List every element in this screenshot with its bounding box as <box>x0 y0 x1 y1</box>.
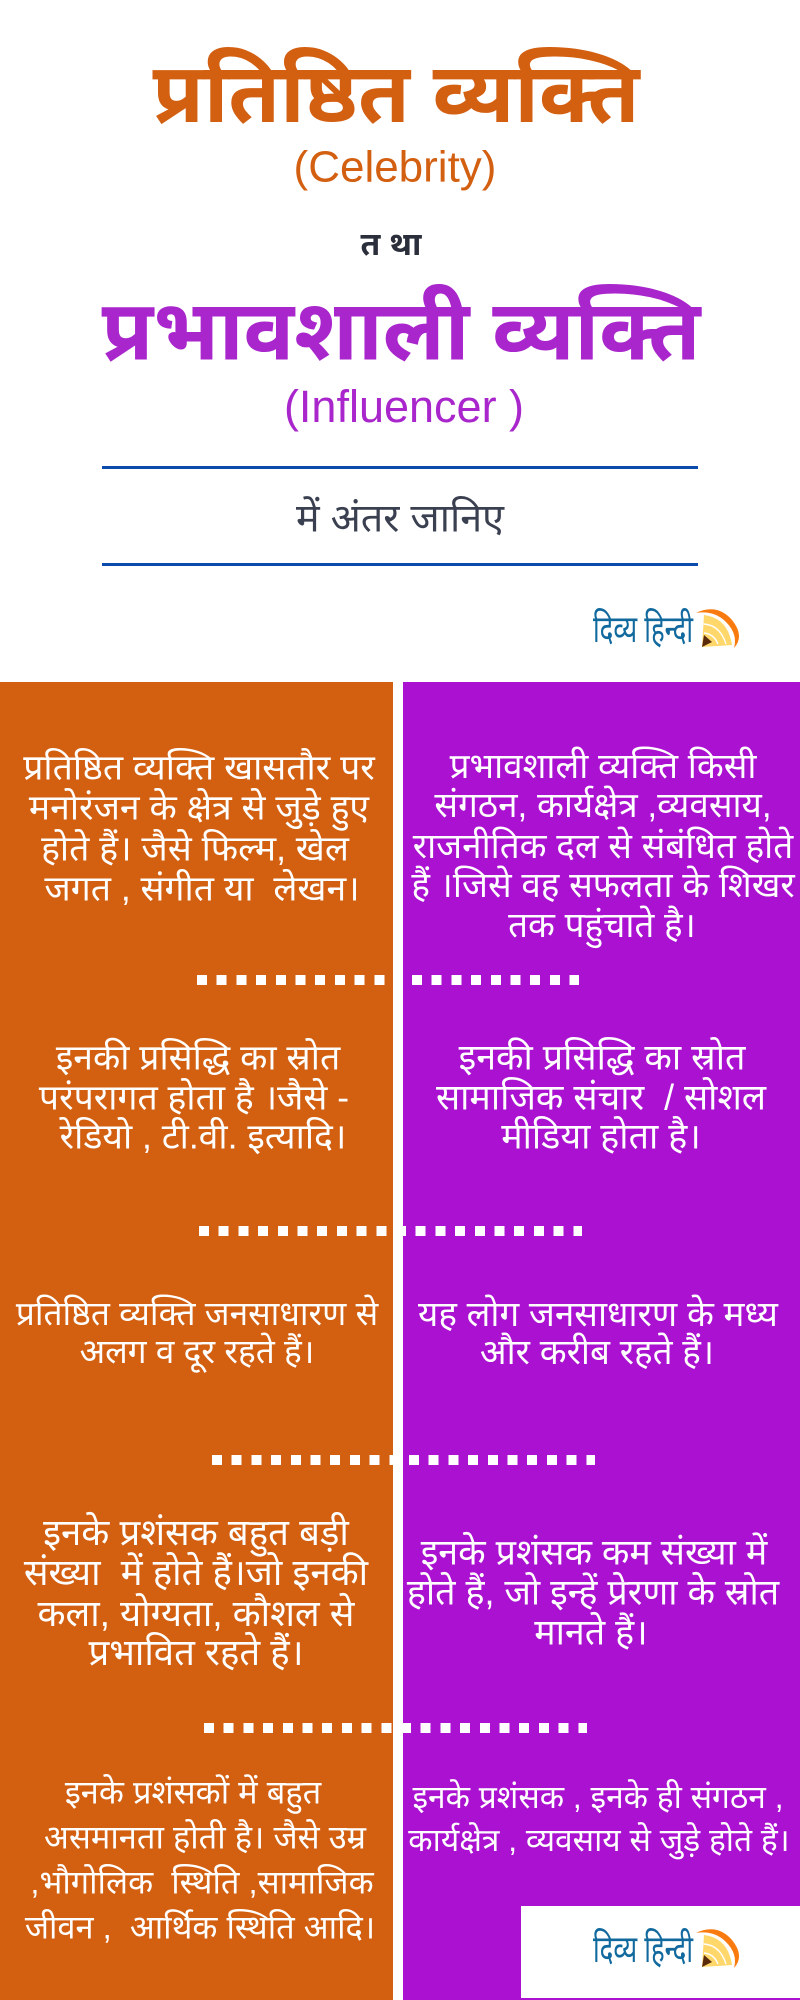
text: right row 1: तक पहुंचाते है। <box>508 906 696 945</box>
text: right row 1: संगठन, कार्यक्षेत्र ,व्यवसाय, <box>434 786 772 825</box>
subheading: know the difference: में अंतर जानिए <box>296 496 504 540</box>
text: right row 3: और करीब रहते हैं। <box>480 1333 714 1372</box>
text: left row 5: जीवन , आर्थिक स्थिति आदि। <box>25 1908 375 1945</box>
text: right row 2: इनकी प्रसिद्धि का स्रोत <box>459 1038 745 1078</box>
text: left row 1: होते हैं। जैसे फिल्म, खेल <box>41 829 349 869</box>
divider dots: row 2 <box>199 1226 582 1236</box>
divider dots: row 1 right <box>412 975 579 985</box>
text: left row 4: इनके प्रशंसक बहुत बड़ी <box>43 1512 349 1553</box>
text: left row 4: संख्या में होते हैं।जो इनकी <box>24 1552 368 1593</box>
text: right row 4: मानते हैं। <box>534 1613 648 1653</box>
text: left row 5 <box>24 1773 375 1945</box>
logo: top: दिव्य हिन्दी <box>593 607 694 651</box>
text: left row 4: प्रभावित रहते हैं। <box>88 1632 304 1673</box>
text: left row 5: ,भौगोलिक स्थिति ,सामाजिक <box>30 1863 374 1900</box>
text: left row 4: कला, योग्यता, कौशल से <box>38 1593 354 1634</box>
logo panel: bottom right <box>521 1906 800 1998</box>
text: left row 1: प्रतिष्ठित व्यक्ति खासतौर पर <box>23 748 375 788</box>
title: influencer heading: प्रभावशाली व्यक्ति <box>102 284 700 378</box>
text: left row 2: रेडियो , टी.वी. इत्यादि। <box>60 1117 346 1157</box>
text: right row 3: यह लोग जनसाधारण के मध्य <box>418 1295 778 1334</box>
text: left row 2 <box>38 1038 349 1157</box>
text: right row 1: राजनीतिक दल से संबंधित होते <box>413 827 793 866</box>
text: right row 1: हैं ।जिसे वह सफलता के शिखर <box>411 866 795 905</box>
text: left row 3 <box>16 1294 379 1373</box>
divider dots: row 1 left <box>197 975 393 985</box>
text: left row 3: अलग व दूर रहते हैं। <box>80 1334 314 1371</box>
text: right row 3 <box>418 1294 778 1372</box>
text: right row 2: मीडिया होता है। <box>501 1117 701 1157</box>
text: right row 5: कार्यक्षेत्र , व्यवसाय से जुड़े होते हैं। <box>408 1822 790 1858</box>
text: right row 2: सामाजिक संचार / सोशल <box>436 1078 766 1118</box>
subtitle: Influencer: (Influencer ) <box>284 381 524 432</box>
text: right row 1: प्रभावशाली व्यक्ति किसी <box>450 747 756 786</box>
panel: influencer column <box>403 682 800 2000</box>
text: right row 4: होते हैं, जो इन्हें प्रेरणा के स्रोत <box>407 1573 779 1613</box>
text: right row 2 <box>436 1037 767 1157</box>
text: left row 5: इनके प्रशंसकों में बहुत <box>65 1773 321 1810</box>
panel: celebrity column <box>0 682 393 2000</box>
text: left row 5: असमानता होती है। जैसे उम्र <box>44 1818 366 1855</box>
bottom rule <box>102 563 698 566</box>
divider dots: row 4 <box>204 1723 587 1733</box>
subtitle: Celebrity: (Celebrity) <box>294 143 496 192</box>
text: left row 3: प्रतिष्ठित व्यक्ति जनसाधारण से <box>16 1296 378 1333</box>
divider dots: row 3 <box>212 1455 595 1465</box>
text: left row 2: परंपरागत होता है ।जैसे - <box>39 1078 349 1118</box>
logo: bottom: दिव्य हिन्दी <box>593 1927 694 1971</box>
text: right row 4: इनके प्रशंसक कम संख्या में <box>421 1533 767 1573</box>
text: right row 5: इनके प्रशंसक , इनके ही संगठन , <box>412 1779 784 1815</box>
text: left row 1: मनोरंजन के क्षेत्र से जुड़े हुए <box>29 788 369 828</box>
text: left row 1: जगत , संगीत या लेखन। <box>44 869 360 909</box>
top rule <box>102 466 698 469</box>
text: right row 1 <box>411 746 796 948</box>
text: left row 1 <box>23 748 376 909</box>
connector word: tatha: त था <box>361 226 421 262</box>
text: left row 4 <box>24 1512 369 1673</box>
title: celebrity heading: प्रतिष्ठित व्यक्ति <box>152 46 640 140</box>
text: left row 2: इनकी प्रसिद्धि का स्रोत <box>56 1038 340 1078</box>
